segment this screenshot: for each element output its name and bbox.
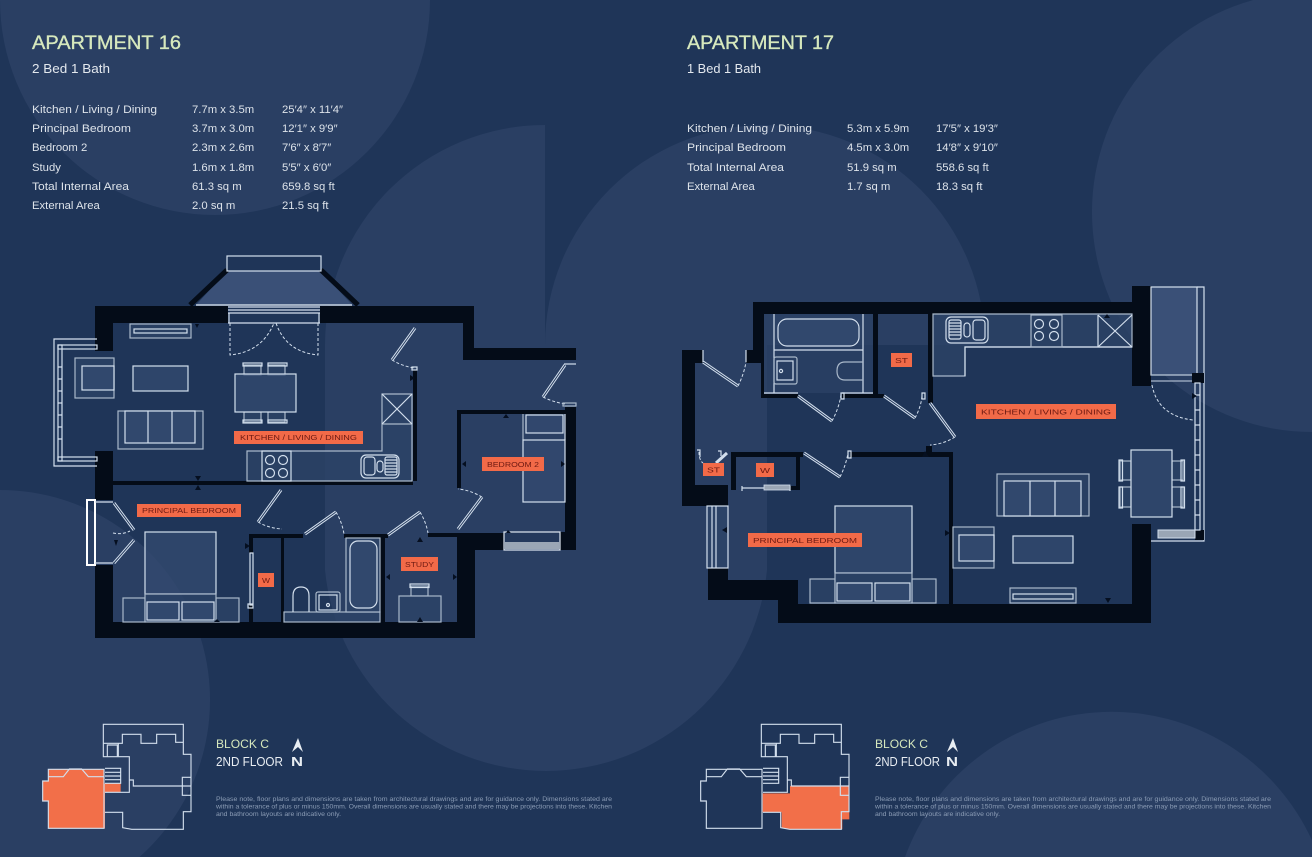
dimensions table: Apartment 16: 25′4″ x 11′4″ (282, 104, 343, 116)
dimensions table: Apartment 17 (687, 123, 998, 193)
label: kitchen living dining (976, 404, 1116, 419)
label: wardrobe: W (262, 578, 270, 585)
dimensions table: Apartment 16: 7′6″ x 8′7″ (282, 142, 331, 154)
disclaimer: Apartment 17: Please note, floor plans and dimensions are taken from architectural drawings and are for guidance only. Dimensions stated are (875, 797, 1272, 803)
label: wardrobe (756, 463, 774, 477)
dimensions table: Apartment 16: Total Internal Area (32, 181, 130, 193)
heading: Apartment 16 (32, 32, 181, 76)
bathroom fittings (284, 538, 380, 622)
label: study (401, 557, 438, 571)
block label: Apartment 17: BLOCK C (875, 739, 928, 751)
bedroom 2 furniture (523, 414, 565, 502)
key plan: Apartment 16 (43, 724, 191, 829)
terrace doors (228, 307, 320, 355)
furniture: principal bedroom (123, 532, 239, 622)
furniture: living and dining (953, 450, 1184, 603)
icon: north arrow, Apartment 16 (291, 738, 303, 769)
dimensions table: Apartment 16: 1.6m x 1.8m (192, 162, 254, 174)
dimensions table: Apartment 16: 7.7m x 3.5m (192, 104, 254, 116)
block label: Apartment 16: 2ND FLOOR (216, 755, 283, 769)
disclaimer: Apartment 17: within a tolerance of plus or minus 150mm. Overall dimensions are usually stated and there may be projections into these. Kitchen (874, 804, 1271, 810)
label: principal bedroom: PRINCIPAL BEDROOM (753, 538, 857, 545)
icon: north arrow, Apartment 17 (946, 738, 958, 769)
bedroom window (87, 500, 113, 565)
label: principal bedroom (137, 504, 241, 517)
dimensions table: Apartment 17: 5.3m x 5.9m (847, 123, 909, 135)
dimensions table: Apartment 17: 14′8″ x 9′10″ (936, 142, 998, 154)
floor plan: Apartment 17 (682, 286, 1204, 623)
label: storage 2: ST (707, 468, 721, 474)
block label: Apartment 17: 2ND FLOOR (875, 755, 940, 769)
balcony (1151, 287, 1204, 541)
dimensions table: Apartment 17: 1.7 sq m (847, 181, 890, 193)
bedroom 2 window (504, 532, 560, 550)
kitchen (247, 394, 412, 481)
dimensions table: Apartment 16: 659.8 sq ft (282, 181, 336, 193)
kitchen (933, 314, 1132, 376)
dimensions table: Apartment 17: 4.5m x 3.0m (847, 142, 909, 154)
label: storage 2 (703, 463, 724, 476)
dimensions table: Apartment 17: 17′5″ x 19′3″ (936, 123, 998, 135)
dimensions table: Apartment 16: 3.7m x 3.0m (192, 123, 254, 135)
furniture: principal bedroom (810, 506, 936, 603)
highlighted unit (43, 769, 121, 828)
label: storage (891, 353, 912, 367)
key plan: Apartment 17 (701, 724, 849, 829)
terrace bay (190, 256, 358, 305)
bedroom window (707, 506, 728, 568)
balcony (54, 339, 97, 466)
doors (697, 350, 955, 477)
wardrobe slider (742, 485, 790, 491)
highlighted unit (763, 786, 849, 829)
dimensions table: Apartment 17: 558.6 sq ft (936, 162, 990, 174)
dimensions table: Apartment 17: Kitchen / Living / Dining (687, 123, 812, 135)
dimensions table: Apartment 17: Total Internal Area (687, 162, 785, 174)
block label: Apartment 16 (216, 739, 283, 769)
heading: Apartment 17: APARTMENT 17 (687, 32, 834, 54)
study desk (399, 584, 441, 622)
wardrobe slider (248, 553, 253, 608)
heading: Apartment 16: 2 Bed 1 Bath (32, 62, 110, 76)
walls (95, 306, 576, 638)
furniture: living and dining (75, 324, 296, 449)
icon: north arrow, Apartment 16: N (291, 754, 303, 769)
heading: Apartment 17: 1 Bed 1 Bath (687, 62, 761, 76)
dimensions table: Apartment 17: 51.9 sq m (847, 162, 897, 174)
label: bedroom 2: BEDROOM 2 (487, 462, 539, 469)
disclaimer: Apartment 16 (215, 797, 613, 818)
label: storage: ST (895, 358, 909, 365)
dimensions table: Apartment 16: 21.5 sq ft (282, 200, 329, 212)
dimensions table: Apartment 16: 12′1″ x 9′9″ (282, 123, 338, 135)
dimensions table: Apartment 16 (32, 104, 343, 212)
disclaimer: Apartment 16: Please note, floor plans and dimensions are taken from architectural drawings and are for guidance only. Dimensions stated are (216, 797, 613, 803)
dimensions table: Apartment 16: 61.3 sq m (192, 181, 242, 193)
bathroom (764, 314, 873, 393)
markers (114, 324, 565, 622)
dimensions table: Apartment 16: 2.0 sq m (192, 200, 235, 212)
label: kitchen living dining: KITCHEN / LIVING / DINING (981, 410, 1111, 416)
label: principal bedroom: PRINCIPAL BEDROOM (142, 508, 236, 515)
block label: Apartment 16: BLOCK C (216, 739, 269, 751)
disclaimer: Apartment 17 (874, 797, 1272, 818)
label: bedroom 2 (482, 457, 544, 471)
dimensions table: Apartment 16: Principal Bedroom (32, 123, 131, 135)
label: wardrobe (258, 573, 274, 587)
dimensions table: Apartment 17: 18.3 sq ft (936, 181, 983, 193)
markers (722, 314, 1197, 603)
dimensions table: Apartment 16: 2.3m x 2.6m (192, 142, 254, 154)
label: wardrobe: W (760, 468, 771, 475)
dimensions table: Apartment 16: 5′5″ x 6′0″ (282, 162, 331, 174)
label: kitchen living dining: KITCHEN / LIVING / DINING (240, 435, 357, 442)
walls (682, 286, 1151, 623)
block label: Apartment 17 (875, 739, 940, 769)
heading: Apartment 17 (687, 32, 834, 76)
dimensions table: Apartment 16: Bedroom 2 (32, 142, 87, 154)
dimensions table: Apartment 17: External Area (687, 181, 756, 193)
dimensions table: Apartment 17: Principal Bedroom (687, 142, 786, 154)
icon: north arrow, Apartment 17: N (946, 754, 958, 769)
disclaimer: Apartment 16: and bathroom layouts are indicative only. (216, 812, 341, 818)
dimensions table: Apartment 16: Study (32, 162, 61, 174)
heading: Apartment 16: APARTMENT 16 (32, 32, 181, 54)
dimensions table: Apartment 16: Kitchen / Living / Dining (32, 104, 157, 116)
label: principal bedroom (748, 533, 862, 547)
label: study: STUDY (405, 562, 434, 569)
disclaimer: Apartment 16: within a tolerance of plus or minus 150mm. Overall dimensions are usually stated and there may be projections into these. Kitchen (215, 804, 612, 810)
dimensions table: Apartment 16: External Area (32, 200, 101, 212)
label: kitchen living dining (234, 431, 363, 444)
disclaimer: Apartment 17: and bathroom layouts are indicative only. (875, 812, 1000, 818)
floor plan: Apartment 16 (54, 256, 576, 638)
doors (113, 328, 576, 563)
